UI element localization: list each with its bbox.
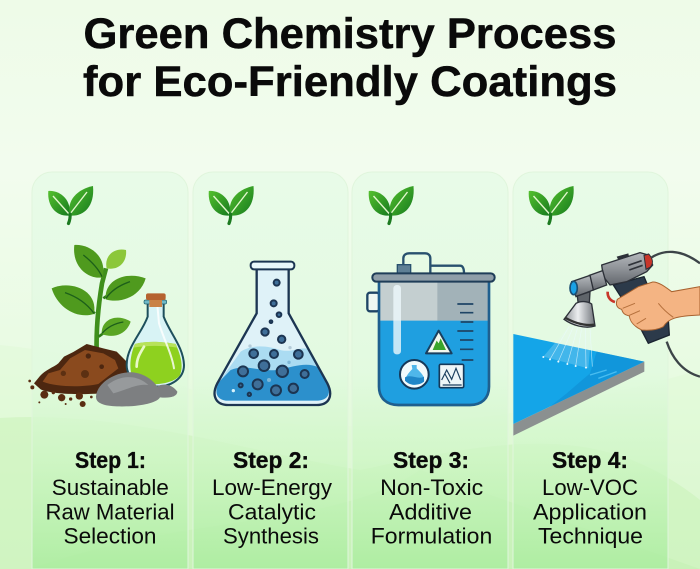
step 1 label: Selection	[64, 524, 156, 548]
step 2 label: Low-Energy	[212, 475, 333, 500]
step 4 label: Technique	[538, 524, 643, 548]
step 2 label: Catalytic	[228, 500, 316, 524]
icon: leaf badge step 3	[369, 186, 414, 224]
illustration: plant, soil, rock and green flask	[28, 245, 184, 407]
icon: leaf badge step 2	[209, 186, 254, 224]
title	[83, 11, 617, 106]
panel: step 4 application technique	[513, 172, 700, 569]
step 3 label: Additive	[389, 500, 472, 524]
step 1 label: Step 1:	[75, 447, 146, 473]
illustration: spray gun, hand and coated panel	[513, 252, 700, 436]
step 4 label: Step 4:	[552, 447, 628, 473]
step 4 label: Low-VOC	[542, 475, 638, 500]
step 3 label: Formulation	[371, 524, 492, 548]
icon: leaf badge step 1	[48, 186, 93, 224]
step 3 label: Non-Toxic	[380, 475, 483, 500]
step 1 label: Raw Material	[46, 500, 174, 524]
step 1 label	[46, 447, 174, 548]
illustration: erlenmeyer flask with bubbles	[215, 262, 330, 405]
step 3 label	[371, 447, 492, 548]
step 4 label: Application	[533, 500, 647, 524]
illustration: beaker vessel with additive symbols	[367, 253, 495, 405]
step 4 label	[533, 447, 647, 548]
step 2 label: Step 2:	[233, 447, 309, 473]
step 2 label: Synthesis	[223, 524, 319, 548]
panel: step 1 raw material selection	[28, 172, 188, 569]
title: Green Chemistry Process	[84, 11, 616, 58]
icon: leaf badge step 4	[529, 186, 574, 224]
step 2 label	[212, 447, 333, 548]
step 1 label: Sustainable	[52, 475, 169, 500]
title: for Eco-Friendly Coatings	[83, 59, 617, 106]
step 3 label: Step 3:	[393, 447, 469, 473]
panel: step 2 catalytic synthesis	[193, 172, 348, 569]
panel: step 3 additive formulation	[352, 172, 508, 569]
